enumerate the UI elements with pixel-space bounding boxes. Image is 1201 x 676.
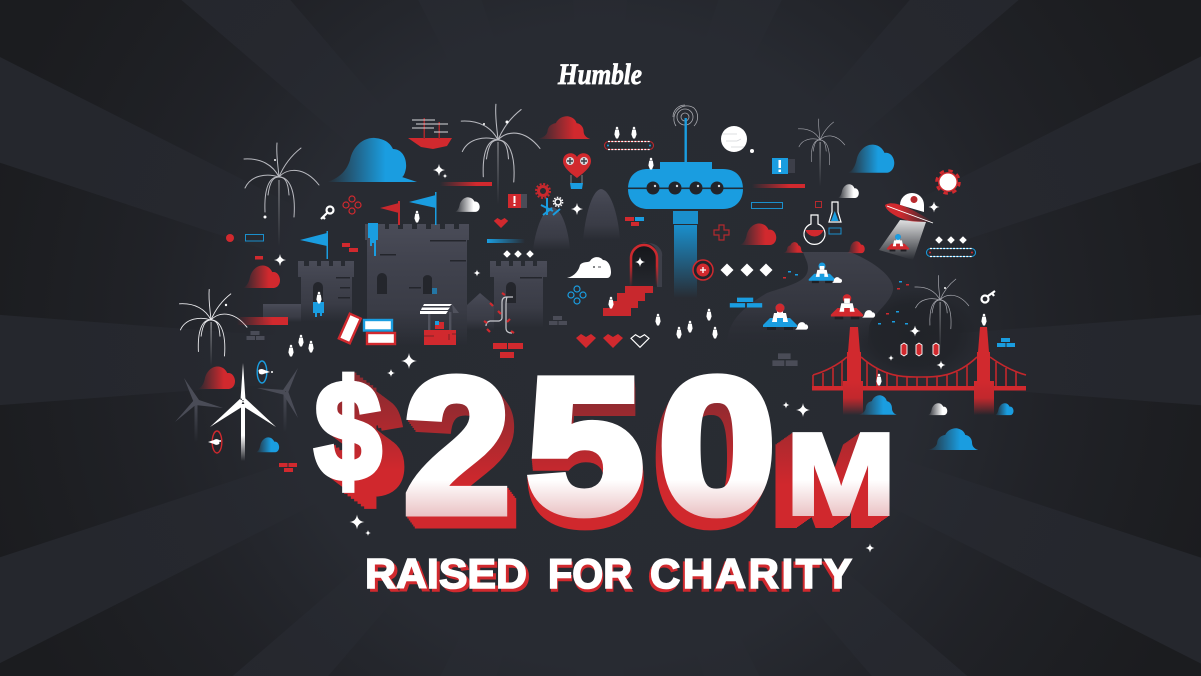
headline: $250M: 5: [526, 338, 644, 553]
bricks: [246, 217, 1015, 472]
headline: $250M: $: [317, 353, 383, 510]
subtitle: raised for charity: FOR: [548, 550, 632, 597]
flowers: [536, 184, 563, 215]
headline: $250M: M: [785, 411, 895, 540]
headline: $250M: M: [777, 416, 888, 545]
headline: $250M: $: [315, 352, 381, 509]
headline: $250M: 0: [657, 340, 775, 555]
headline: $250M: M: [775, 418, 885, 547]
karts: [763, 262, 875, 330]
headline: $250M: 2: [408, 344, 515, 559]
bars and rectangles: [226, 182, 841, 325]
subtitle: raised for charity: RAISED: [365, 550, 527, 597]
subtitle: raised for charity: CHARITY: [648, 553, 850, 600]
people: [288, 127, 987, 386]
sun: [936, 170, 960, 194]
subtitle: raised for charity: RAISED: [368, 553, 530, 600]
hot air balloon heart: [563, 153, 591, 189]
clouds: [198, 116, 1014, 452]
flasks: [804, 202, 841, 244]
headline: $250M: 2: [411, 348, 518, 563]
headline: $250M: M: [779, 415, 889, 544]
headline: $250M: 2: [407, 342, 513, 557]
headline: $250M: M: [780, 414, 890, 543]
headline: $250M: 0: [656, 342, 774, 557]
headline: $250M: 5: [526, 340, 644, 555]
headline: $250M: 5: [527, 350, 645, 565]
headline: $250M: 0: [653, 348, 771, 563]
subtitle: raised for charity: CHARITY: [650, 550, 852, 597]
red crystals: [901, 343, 939, 356]
conveyors: [604, 142, 976, 256]
headline: $250M: 2: [410, 346, 516, 561]
UFO with beam: [879, 193, 933, 260]
headline: $250M: $: [334, 365, 400, 523]
logo: Humble: Humble: [557, 58, 642, 91]
fireworks: [180, 104, 969, 366]
planet: [721, 126, 754, 153]
ship: [408, 118, 452, 149]
headline: $250M: $: [327, 360, 393, 518]
target and diamonds: [503, 236, 967, 280]
headline: $250M: 2: [413, 350, 519, 565]
headline: $250M: [315, 338, 896, 565]
colored dots: [783, 271, 909, 324]
vine pipes: [484, 293, 514, 333]
headline: $250M: $: [320, 355, 386, 513]
blue slime: [313, 223, 437, 317]
headline: $250M: 0: [654, 346, 772, 561]
road and hills: [533, 189, 977, 380]
headline: $250M: M: [769, 422, 879, 551]
headline: $250M: $: [330, 363, 396, 520]
portal rings: [208, 361, 273, 453]
castle: [263, 224, 547, 345]
headline: $250M: 0: [655, 344, 773, 559]
headline: $250M: M: [783, 412, 893, 541]
headline: $250M: 2: [405, 340, 512, 555]
headline: $250M: $: [324, 358, 390, 515]
headline: $250M: 0: [652, 350, 770, 565]
headline: $250M: 2: [404, 338, 510, 553]
headline: $250M: 5: [527, 346, 644, 561]
hearts: [494, 218, 649, 348]
headline: $250M: 0: [658, 338, 776, 553]
headline: $250M: M: [773, 419, 883, 548]
tower: [628, 105, 743, 298]
alert icons: [508, 158, 795, 208]
wind turbines: [175, 363, 298, 461]
headline: $250M: 5: [527, 348, 645, 563]
subtitle: raised for charity: FOR: [549, 553, 633, 600]
white cloud with face: [567, 257, 611, 278]
castle windows and details: [313, 240, 542, 305]
arch door and stairs: [603, 242, 662, 316]
subtitle: raised for charity: [365, 550, 852, 600]
books: [339, 314, 395, 344]
bridge: [812, 327, 1026, 415]
headline: $250M: M: [786, 410, 896, 539]
headline: $250M: M: [782, 413, 892, 542]
headline: $250M: $: [337, 368, 403, 525]
headline: $250M: 5: [527, 344, 644, 559]
headline: $250M: 5: [526, 342, 644, 557]
key icons: [321, 206, 995, 302]
sparkles: [274, 164, 946, 552]
clover rings: [343, 196, 586, 304]
wishing well: [420, 304, 459, 345]
headline: $250M: M: [772, 420, 882, 549]
flags: [300, 192, 436, 259]
headline: $250M: M: [776, 417, 886, 546]
headline: $250M: M: [770, 421, 880, 550]
